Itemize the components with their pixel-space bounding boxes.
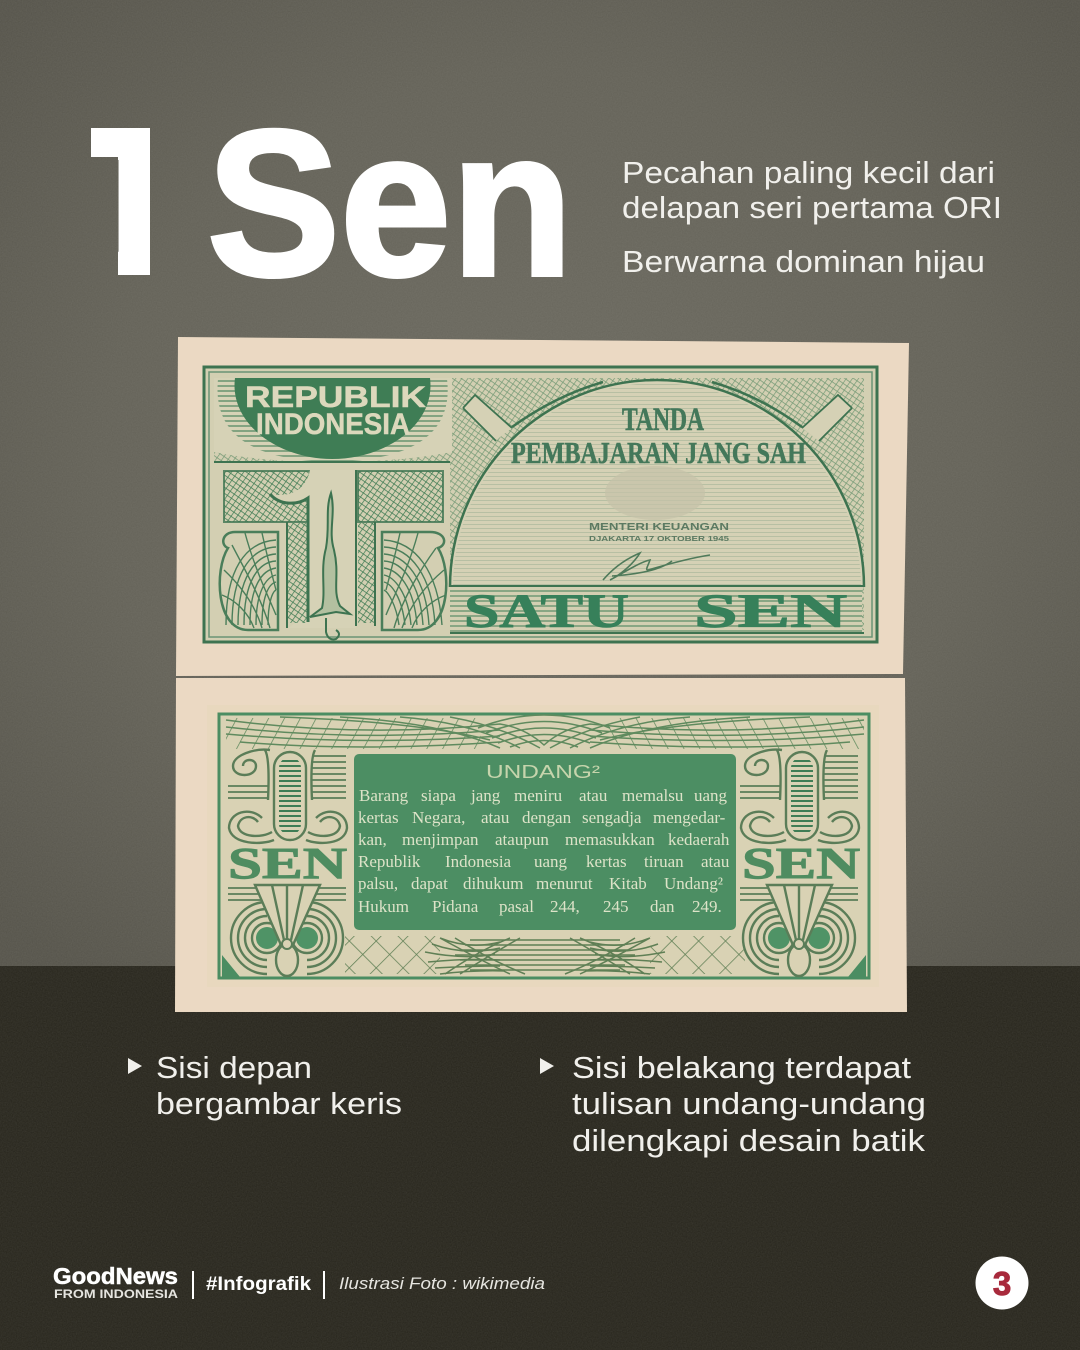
banknote: back [175,678,907,1012]
text block: description: delapan seri pertama ORI [622,190,1002,225]
law text panel: Barang [359,786,409,805]
text block: back side note: Sisi belakang terdapat [572,1050,911,1085]
law text panel: dapat [411,874,448,893]
text block: description: Pecahan paling kecil dari [622,155,995,190]
law text panel: Undang² [664,874,723,893]
law text panel: kedaerah [668,830,730,849]
ornament: right Sen: SEN [742,839,860,888]
text: Menteri Keuangan: MENTERI KEUANGAN [589,522,729,533]
back paper [175,678,907,1012]
footer: hashtag: #Infografik [206,1274,311,1295]
footer logo: GoodNews from Indonesia: FROM INDONESIA [54,1287,178,1301]
law text panel: Indonesia [445,852,512,871]
law text panel: Negara, [412,808,465,827]
icon: bullet arrow left [128,1058,142,1074]
law text panel: atau [481,808,510,827]
law text panel: kertas [358,808,399,827]
law text panel: menjimpan [402,830,479,849]
law text panel: palsu, [358,874,398,893]
background: lower dark band [0,966,1080,1350]
law text panel: memalsu [622,786,684,805]
icon: bullet arrow right [540,1058,554,1074]
watermark seal [605,466,705,520]
law text panel: uang [534,852,568,871]
footer: photo credit: Ilustrasi Foto : wikimedia [339,1274,545,1293]
law text panel: UNDANG² [486,762,600,782]
footer: hashtag [192,1271,325,1299]
guilloche: top band [226,715,864,749]
law text panel [354,754,736,930]
band: Satu Sen: SEN [694,585,848,638]
text block: description: Berwarna dominan hijau [622,244,985,279]
law text panel: tiruan [644,852,684,871]
page number badge: 3 [993,1265,1011,1302]
law text panel: kan, [358,830,387,849]
law text panel: 244, [550,897,580,916]
text block: front side note: bergambar keris [156,1086,402,1121]
title [91,128,563,279]
text block: back side note: tulisan undang-undang [572,1086,926,1121]
law text panel: 245 [603,897,628,916]
ornament: left Sen: SEN [228,839,347,888]
scroll ornaments [220,532,446,630]
oval emblem: Republik Indonesia [214,378,452,462]
ornament: left Sen [222,750,347,977]
law text panel: Hukum [358,897,409,916]
law text panel: 249. [692,897,722,916]
law text panel: dengan [522,808,572,827]
law text panel: menurut [536,874,593,893]
band: Satu Sen: SATU [464,585,629,638]
law text panel: atau [579,786,608,805]
law text panel: kertas [586,852,627,871]
law text panel: Republik [358,852,421,871]
text block: back side note [572,1050,926,1158]
guilloche: bottom band [345,936,745,974]
text: Menteri Keuangan [589,522,729,543]
background: upper grey panel [0,0,1080,966]
text: Tanda Pembajaran Jang Sah: PEMBAJARAN JANG SAH [511,435,806,470]
page number badge [976,1256,1028,1310]
law text panel: Pidana [432,897,479,916]
title: 1 [72,88,188,320]
text block: back side note: dilengkapi desain batik [572,1123,926,1158]
law text panel: pasal [499,897,534,916]
law text panel: ataupun [495,830,549,849]
law text panel: uang [694,786,728,805]
law text panel: meniru [514,786,563,805]
text block: front side note: Sisi depan [156,1050,312,1085]
law text panel: Kitab [609,874,647,893]
text: Tanda Pembajaran Jang Sah: TANDA [622,402,704,438]
signature [603,553,710,580]
footer logo: GoodNews from Indonesia: GoodNews [53,1263,178,1289]
banknote: front [176,337,909,676]
band: Satu Sen [450,585,864,638]
law text panel: dan [650,897,675,916]
front engraved frame [204,367,877,642]
law text panel: memasukkan [565,830,655,849]
text block: description [622,155,1002,279]
title: Sen [207,88,573,320]
oval emblem: Republik Indonesia: REPUBLIK [245,381,426,414]
law text panel: jang [470,786,501,805]
law text panel: sengadja [582,808,642,827]
numeral 1 with keris [214,461,450,639]
law text panel: siapa [421,786,456,805]
back engraved frame [207,705,879,987]
law text panel: atau [701,852,730,871]
law text panel: dihukum [463,874,523,893]
text: Tanda Pembajaran Jang Sah [511,402,806,470]
oval emblem: Republik Indonesia: INDONESIA [256,408,410,441]
ornament: right Sen [740,750,866,977]
law text panel: mengedar- [653,808,726,827]
footer logo: GoodNews from Indonesia [53,1263,178,1301]
text block: front side note [156,1050,402,1121]
front paper [176,337,909,676]
text: Menteri Keuangan: DJAKARTA 17 OKTOBER 1945 [589,534,729,543]
